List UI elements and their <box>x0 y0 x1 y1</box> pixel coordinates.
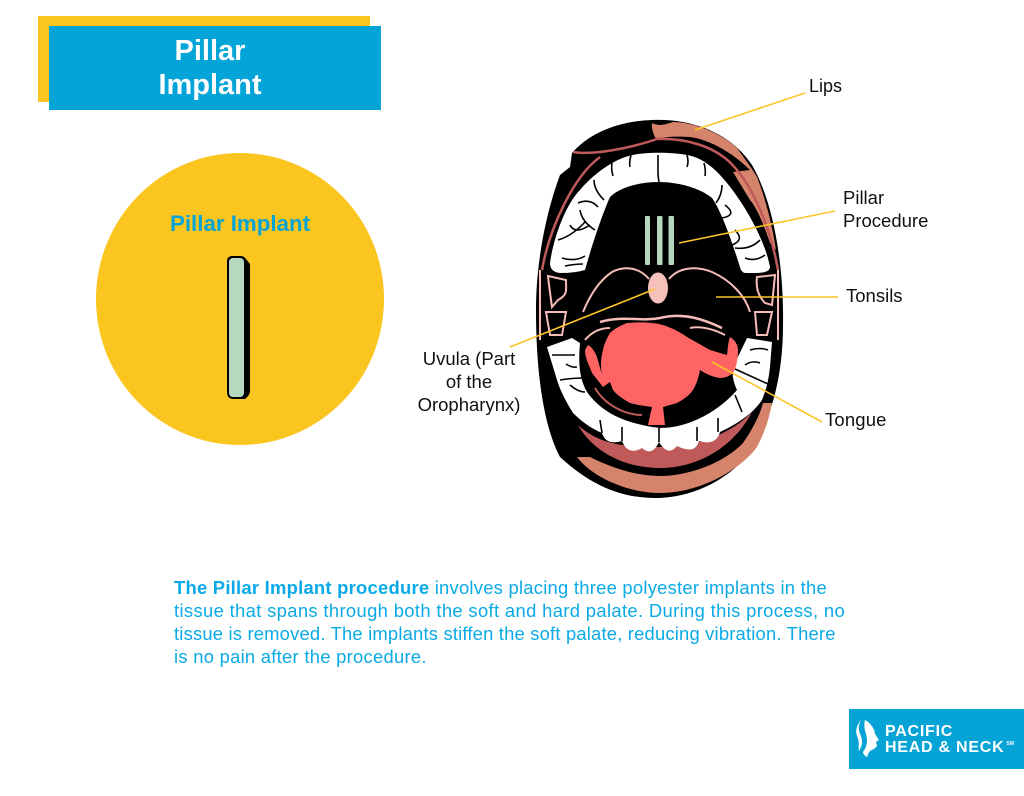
pillar implants <box>645 216 674 265</box>
description text: is no pain after the procedure. <box>174 646 427 667</box>
label: uvula <box>418 348 520 415</box>
label: uvula: of the <box>446 371 492 392</box>
lower lip <box>577 403 772 493</box>
description text: tissue is removed. The implants stiffen the soft palate, reducing vibration. There <box>174 623 836 644</box>
title banner: Implant <box>158 69 262 101</box>
logo wordmark: HEAD & NECK SM <box>885 739 1014 756</box>
description text: tissue that spans through both the soft and hard palate. During this process, no <box>174 600 845 621</box>
lower teeth <box>547 338 772 451</box>
line: tonsils <box>716 296 838 298</box>
label: uvula: Oropharynx) <box>418 394 520 415</box>
title banner <box>38 16 381 110</box>
label: pillar procedure <box>843 187 928 231</box>
icon: head profile <box>856 720 879 757</box>
lip inner line <box>542 139 778 270</box>
uvula <box>648 272 668 304</box>
tongue shadow line <box>595 388 642 415</box>
logo wordmark <box>885 723 1014 756</box>
logo <box>849 709 1024 769</box>
label: pillar procedure: Procedure <box>843 210 928 231</box>
line: pillar procedure <box>679 211 835 243</box>
palate arches and side structures <box>540 268 778 340</box>
label: uvula: Uvula (Part <box>423 348 515 369</box>
upper teeth <box>550 153 770 273</box>
tongue <box>585 322 738 425</box>
line: uvula <box>510 289 655 347</box>
description text: The Pillar Implant procedure involves placing three polyester implants in the <box>174 577 827 598</box>
label: pillar procedure: Pillar <box>843 187 884 208</box>
upper lip <box>652 122 776 250</box>
panel: implant circle <box>96 153 384 445</box>
mouth outline <box>536 120 783 498</box>
label: tongue: Tongue <box>825 409 887 430</box>
mouth diagram <box>536 120 784 498</box>
line: tongue <box>712 362 822 422</box>
panel: implant circle: Pillar Implant <box>170 211 310 236</box>
logo wordmark: PACIFIC <box>885 723 953 740</box>
line: lips <box>695 93 805 130</box>
label: lips: Lips <box>809 76 842 96</box>
title banner: Pillar <box>175 35 245 67</box>
label: tonsils: Tonsils <box>846 285 903 306</box>
lower gum <box>578 412 752 468</box>
description text <box>174 577 845 667</box>
